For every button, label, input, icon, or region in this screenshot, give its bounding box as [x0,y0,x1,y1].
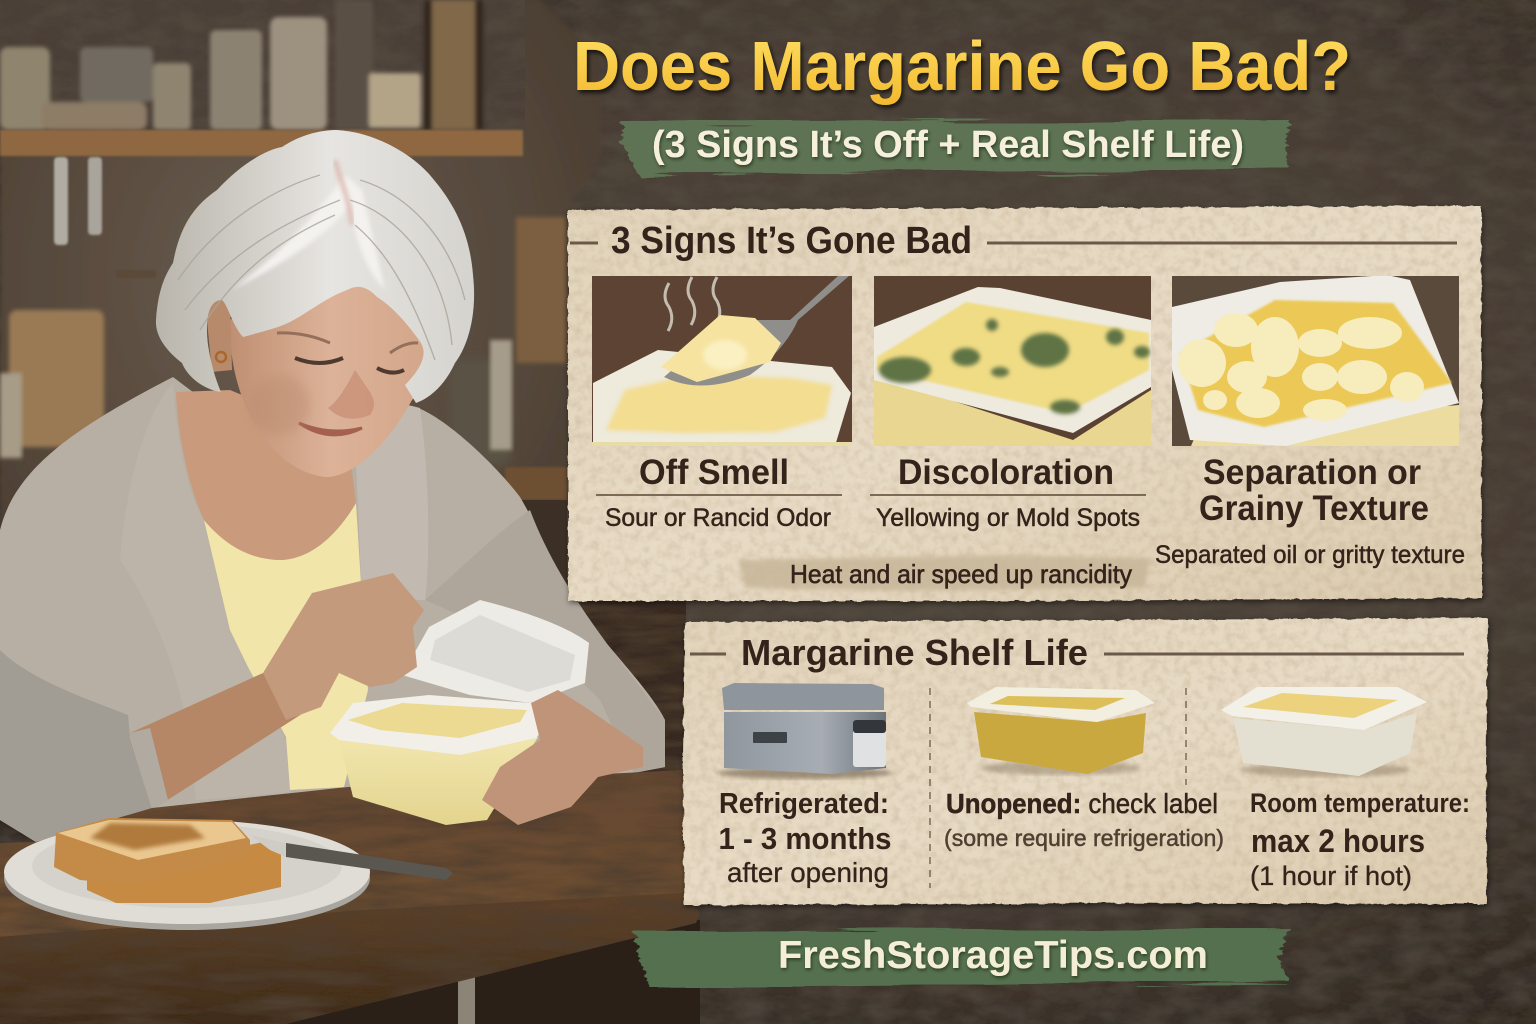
right hand [482,690,643,825]
sign 2: discoloration photo [874,276,1151,446]
plate with toast and knife [4,818,453,930]
yellow shirt [204,503,368,790]
refrigerated text: 1 - 3 months [718,821,892,856]
panel heading: Margarine Shelf Life [741,632,1088,673]
dashed divider [929,688,931,888]
footer banner: FreshStorageTips.com [778,934,1208,977]
sign 1 caption [596,453,842,532]
unopened text: (some require refrigeration) [944,825,1224,851]
sign 2 caption: Yellowing or Mold Spots [876,504,1140,532]
refrigerated text: Refrigerated: [719,788,889,820]
panel heading: 3 Signs It’s Gone Bad [611,220,972,262]
sign 1 caption: Off Smell [639,453,789,492]
left lower sleeve [0,650,152,842]
icon: unopened tub [967,687,1155,775]
rancidity note: Heat and air speed up rancidity [790,559,1132,589]
margarine tub with lid and hands [263,573,643,825]
refrigerated text: after opening [727,857,889,888]
panel: 3 signs [568,206,1482,601]
subtitle banner: (3 Signs It’s Off + Real Shelf Life) [652,124,1244,166]
room temperature text: max 2 hours [1251,823,1425,859]
sign 2 caption [870,453,1146,532]
white hair [156,130,474,403]
margarine [348,703,527,738]
head and face [204,275,430,477]
room temperature text: (1 hour if hot) [1250,861,1412,891]
panel: shelf life [683,618,1488,905]
tub rim [330,695,549,755]
subtitle banner [622,120,1290,175]
dashed divider [1185,688,1187,785]
neck and chest [176,390,356,560]
lid [402,600,589,703]
sign 3 caption: Separation or [1203,453,1421,492]
left hand [263,573,424,720]
unopened text [944,788,1224,851]
icon: refrigerator appliance [717,683,893,779]
icon: room temperature tub [1221,687,1427,777]
sign 3 caption: Separated oil or gritty texture [1155,541,1465,569]
footer banner [634,928,1290,988]
photo: woman checking margarine at kitchen table [0,0,700,1024]
room temperature text: Room temperature: [1250,788,1470,818]
panel background [683,618,1488,905]
refrigerated text [718,788,892,888]
unopened text: Unopened: check label [946,788,1218,819]
cardigan and body [0,377,665,842]
right cardigan band [356,403,428,600]
title: Does Margarine Go Bad? [573,27,1351,105]
panel background [568,206,1482,601]
left cardigan front band [120,383,290,800]
sign 2 caption: Discoloration [898,453,1114,492]
tub body [339,737,538,825]
sign 1: off smell photo [592,276,852,446]
sign 3: separation photo [1172,275,1459,446]
sign 3 caption [1155,453,1465,569]
sign 3 caption: Grainy Texture [1199,489,1429,528]
kitchen background [0,0,686,800]
room temperature text [1250,788,1470,891]
wooden table [0,770,700,1024]
left forearm [130,673,308,810]
sign 1 caption: Sour or Rancid Odor [605,504,831,532]
